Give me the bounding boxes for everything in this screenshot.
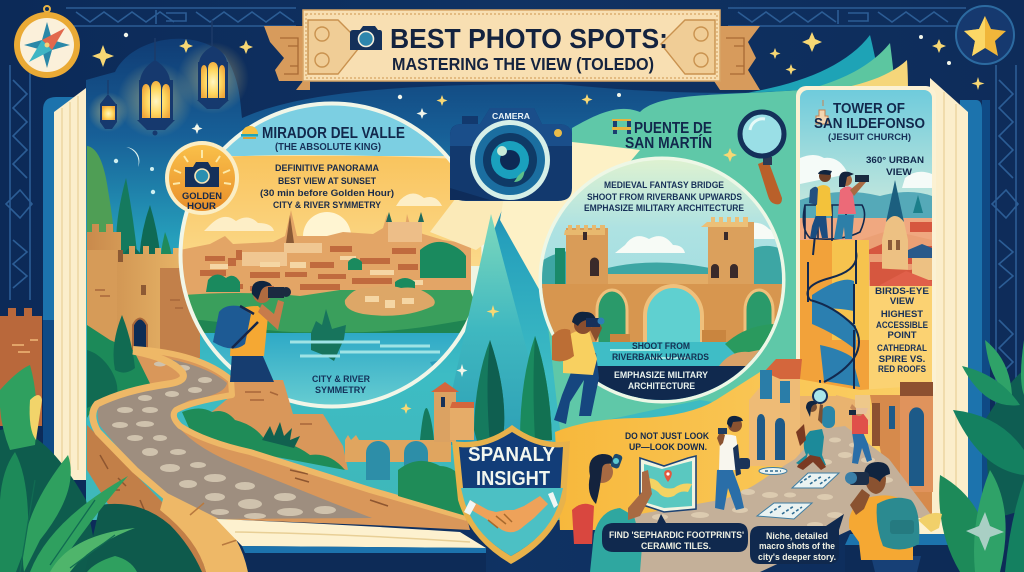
icon: camera: CAMERA [492,111,530,121]
subheading: Jesuit church: (JESUIT CHURCH) [828,131,911,142]
text block: Puente tips: SHOOT FROM RIVERBANK UPWARDS [587,192,742,202]
panel: shield, Spanaly Insight [452,425,570,564]
lanterns [88,20,249,138]
panel: shield, Spanaly Insight: SPANALY [468,444,556,466]
callout: niche macro shots: city's deeper story. [758,552,836,562]
icon: camera [450,108,572,201]
right foliage [918,340,1024,572]
sparkle stars [92,32,984,414]
badge: golden hour [165,141,239,215]
book cover and page edges [43,78,990,540]
ribbon tails [264,26,760,90]
text block: tower tips [875,286,929,375]
terrace under photographer [190,380,348,470]
panel: Tower of San Ildefonso [796,86,936,400]
text block: Puente tips: MEDIEVAL FANTASY BRIDGE [604,180,724,190]
text block: tower tips: ACCESSIBLE [876,320,928,331]
callout: Sephardic footprints [602,514,748,552]
icon: compass [14,6,80,78]
icon: sunset [241,126,258,139]
text block: do not just look up: UP—LOOK DOWN. [629,442,707,453]
book bottom page edges [216,518,1024,572]
tourist with camera, white shirt [715,416,750,510]
panel: left castle towers [87,224,200,360]
lantern right [177,20,249,114]
panel: mint background for Puente [545,90,800,430]
callout: Sephardic footprints: FIND 'SEPHARDIC FOOTPRINTS' [609,529,744,540]
text block: tower tips: SPIRE VS. [879,354,925,365]
heading: Puente de San Martin [625,120,712,152]
page background [86,39,800,520]
text block: tower tips: BIRDS-EYE [875,286,929,297]
curling book pages top right [680,35,908,100]
ceramic tiles [757,468,839,519]
subheading: the absolute king: (THE ABSOLUTE KING) [275,142,381,153]
right wall face [133,349,470,530]
caption: 360 urban view: 360° URBAN [866,155,924,166]
badge: golden hour: GOLDEN [182,191,222,201]
text block: Mirador tips [260,163,394,211]
stone path and walls [87,315,470,572]
heading: Tower of San Ildefonso: TOWER OF [833,101,905,117]
icon: bridge [612,119,631,134]
caption: 360 urban view: VIEW [886,167,913,178]
panel: Puente de San Martin [539,119,790,411]
foliage beside wall [182,408,345,470]
icon: title camera [350,26,382,50]
panel: Mirador del Valle [170,100,500,413]
icon: magnifying glass [740,112,784,204]
caption: shoot from riverbank: RIVERBANK UPWARDS [612,351,709,362]
lantern small [88,80,128,132]
callout: niche macro shots: Niche, detailed [766,531,828,541]
text block: Mirador tips: (30 min before Golden Hour) [260,188,394,199]
light spear [440,214,552,445]
caption: city and river symmetry: SYMMETRY [315,385,366,395]
text block: tower tips: CATHEDRAL [877,343,927,354]
callout: niche macro shots: macro shots of the [759,541,835,551]
text block: do not just look up [625,431,709,453]
left foliage [0,365,202,572]
left wall scene outside book [0,308,42,426]
caption: shoot from riverbank: SHOOT FROM [632,340,690,351]
panel: street scene [555,359,933,572]
icon: church [816,100,828,124]
text block: Mirador tips: BEST VIEW AT SUNSET [278,176,376,187]
wall cap bands [133,349,467,518]
woman with phone and red backpack [572,453,652,572]
caption: city and river symmetry: CITY & RIVER [312,374,370,384]
page sparkles on sky [114,125,199,194]
text block: Puente tips: EMPHASIZE MILITARY ARCHITECTURE [584,203,744,213]
badge: golden hour: HOUR [187,201,217,211]
heading: best photo spots: BEST PHOTO SPOTS: [390,23,668,54]
caption: emphasize military architecture: EMPHASIZE MILITARY [614,369,709,380]
text block: Mirador tips: DEFINITIVE PANORAMA [275,163,379,174]
title banner [264,10,760,90]
callout: Sephardic footprints: CERAMIC TILES. [641,540,711,551]
trees behind left castle [87,146,176,300]
caption: emphasize military architecture [614,369,709,391]
callout: niche macro shots [750,514,844,564]
heading: Tower of San Ildefonso: SAN ILDEFONSO [814,116,925,132]
foreground photographer with backpack [845,462,921,572]
lantern large [117,38,193,138]
heading: Mirador del Valle: MIRADOR DEL VALLE [262,125,405,142]
text block: tower tips: POINT [887,330,917,341]
left wall brick [87,425,206,572]
icon: star medallion [956,6,1014,64]
text block: Mirador tips: CITY & RIVER SYMMETRY [273,200,382,211]
panel: shield, Spanaly Insight: INSIGHT [476,468,550,490]
subheading: mastering the view: MASTERING THE VIEW (TOLEDO) [392,54,654,74]
icon: map [640,456,696,512]
text block: do not just look up: DO NOT JUST LOOK [625,431,709,442]
caption: shoot from riverbank [612,340,709,362]
small dots and stars [124,33,951,377]
heading: Puente de San Martin: PUENTE DE [634,120,712,137]
photographer at bridge [552,312,604,424]
cobble road [98,354,372,519]
heading: Tower of San Ildefonso [814,101,925,132]
photographer at Mirador [213,281,291,382]
caption: 360 urban view [866,155,924,178]
heading: Puente de San Martin: SAN MARTÍN [625,135,712,152]
green slope inside path bend [87,325,180,418]
text block: tower tips: HIGHEST [881,309,923,320]
light beams from camera [430,140,680,300]
text block: tower tips: VIEW [890,296,914,307]
castle and bridge in the middle [345,336,552,516]
tourist with magnifier [796,389,827,470]
text block: tower tips: RED ROOFS [878,364,926,375]
caption: city and river symmetry [312,374,370,395]
text block: Puente tips [584,180,744,213]
tourist in red [849,404,872,464]
caption: emphasize military architecture: ARCHITECTURE [628,380,695,391]
